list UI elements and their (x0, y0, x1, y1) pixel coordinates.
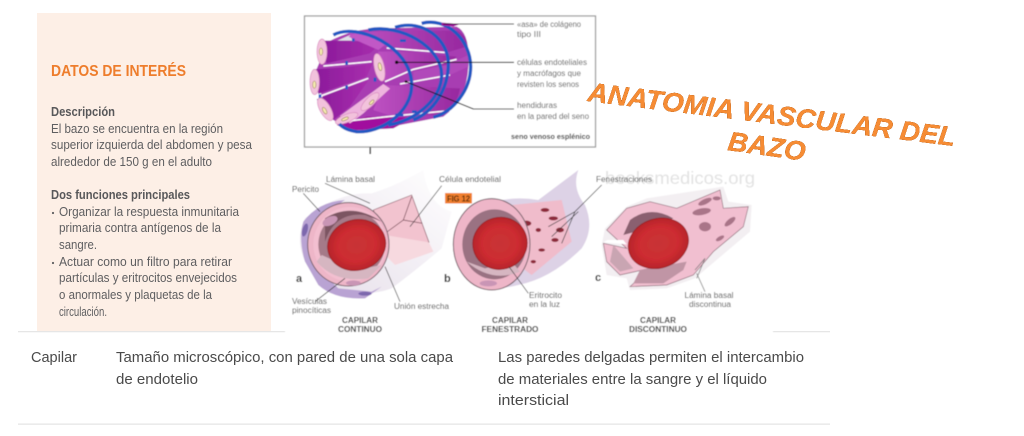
text block: dos funciones principales: circulación. (59, 305, 107, 319)
panel: datos de interés (37, 13, 271, 331)
labels: capilares: a (296, 273, 303, 285)
labels: seno venoso: en la pared del seno (517, 112, 590, 121)
illustration: capilar continuo (300, 170, 452, 302)
labels: capilares: CAPILAR (342, 316, 378, 325)
figure: tipos de capilares (285, 155, 773, 340)
table cell: structure (116, 350, 454, 388)
text block: dos funciones principales: sangre. (59, 238, 97, 252)
labels: capilares: pinocíticas (292, 306, 331, 315)
labels: seno venoso: revisten los senos (517, 80, 579, 89)
table cell: vessel name: Capilar (31, 350, 77, 366)
text block: descripción (51, 105, 252, 169)
labels: capilares: b (444, 273, 451, 285)
figure tag: fig 12: FIG 12 (447, 194, 471, 204)
labels: capilares: c (595, 272, 601, 284)
text block: dos funciones principales (51, 188, 239, 319)
text block: dos funciones principales: primaria contra antígenos de la (59, 221, 221, 235)
labels: capilares (292, 175, 734, 334)
labels: capilares: Lámina basal (326, 175, 375, 184)
table cell: function: Las paredes delgadas permiten el intercambio (498, 350, 804, 366)
labels: capilares: DISCONTINUO (629, 325, 687, 334)
labels: seno venoso (511, 20, 590, 141)
blue collagen rings (333, 22, 471, 132)
labels: capilares: Eritrocito (529, 291, 563, 300)
text block: descripción: Descripción (51, 105, 115, 119)
table cell: function: de materiales entre la sangre y el líquido (498, 372, 767, 388)
text block: descripción: superior izquierda del abdomen y pesa (51, 138, 252, 152)
labels: seno venoso: células endoteliales (517, 58, 587, 67)
labels: capilares: en la luz (529, 300, 560, 309)
labels: capilares: CAPILAR (640, 316, 676, 325)
labels: capilares: Lámina basal (684, 291, 734, 300)
labels: capilares: Unión estrecha (394, 302, 450, 311)
heading: datos de interés: DATOS DE INTERÉS (51, 63, 186, 80)
text block: descripción: El bazo se encuentra en la región (51, 122, 223, 136)
text block: dos funciones principales: Organizar la respuesta inmunitaria (59, 205, 239, 219)
labels: capilares: discontinua (689, 300, 732, 309)
illustration: venous sinus (310, 22, 514, 132)
text block: dos funciones principales: Dos funciones principales (51, 188, 190, 202)
title: anatomia vascular del bazo: BAZO (726, 126, 808, 167)
labels: seno venoso: seno venoso esplénico (511, 132, 590, 141)
text block: dos funciones principales: partículas y eritrocitos envejecidos (59, 271, 237, 285)
labels: capilares: Célula endotelial (439, 175, 501, 184)
labels: capilares: CAPILAR (492, 316, 528, 325)
labels: capilares: Vesículas (292, 297, 327, 306)
title: anatomia vascular del bazo: ANATOMIA VASCULAR DEL (585, 77, 957, 152)
labels: capilares: FENESTRADO (482, 325, 538, 334)
table row: capilar (18, 331, 830, 425)
illustration: capilar fenestrado (453, 170, 602, 293)
labels: capilares: Fenestraciones (596, 175, 652, 184)
figure: seno venoso esplénico (304, 16, 596, 154)
illustration: capilar discontinuo (602, 187, 752, 292)
labels: capilares: Pericito (292, 185, 320, 194)
table cell: structure: de endotelio (116, 372, 198, 388)
text block: descripción: alrededor de 150 g en el adulto (51, 155, 212, 169)
labels: seno venoso: tipo III (517, 30, 541, 39)
leader lines (397, 24, 514, 109)
labels: seno venoso: y macrófagos que (517, 69, 582, 78)
labels: seno venoso: hendiduras (517, 101, 557, 110)
table cell: function: intersticial (498, 393, 569, 409)
table cell: structure: Tamaño microscópico, con pared de una sola capa (116, 350, 454, 366)
watermark: booksmedicos.org: booksmedicos.org (605, 168, 755, 188)
table cell: function (498, 350, 804, 409)
text block: dos funciones principales: o anormales y plaquetas de la (59, 288, 212, 302)
labels: seno venoso: «asa» de colágeno (517, 20, 582, 29)
text block: dos funciones principales: Actuar como un filtro para retirar (59, 255, 232, 269)
pink cell ends (310, 39, 387, 127)
labels: capilares: CONTINUO (338, 325, 382, 334)
